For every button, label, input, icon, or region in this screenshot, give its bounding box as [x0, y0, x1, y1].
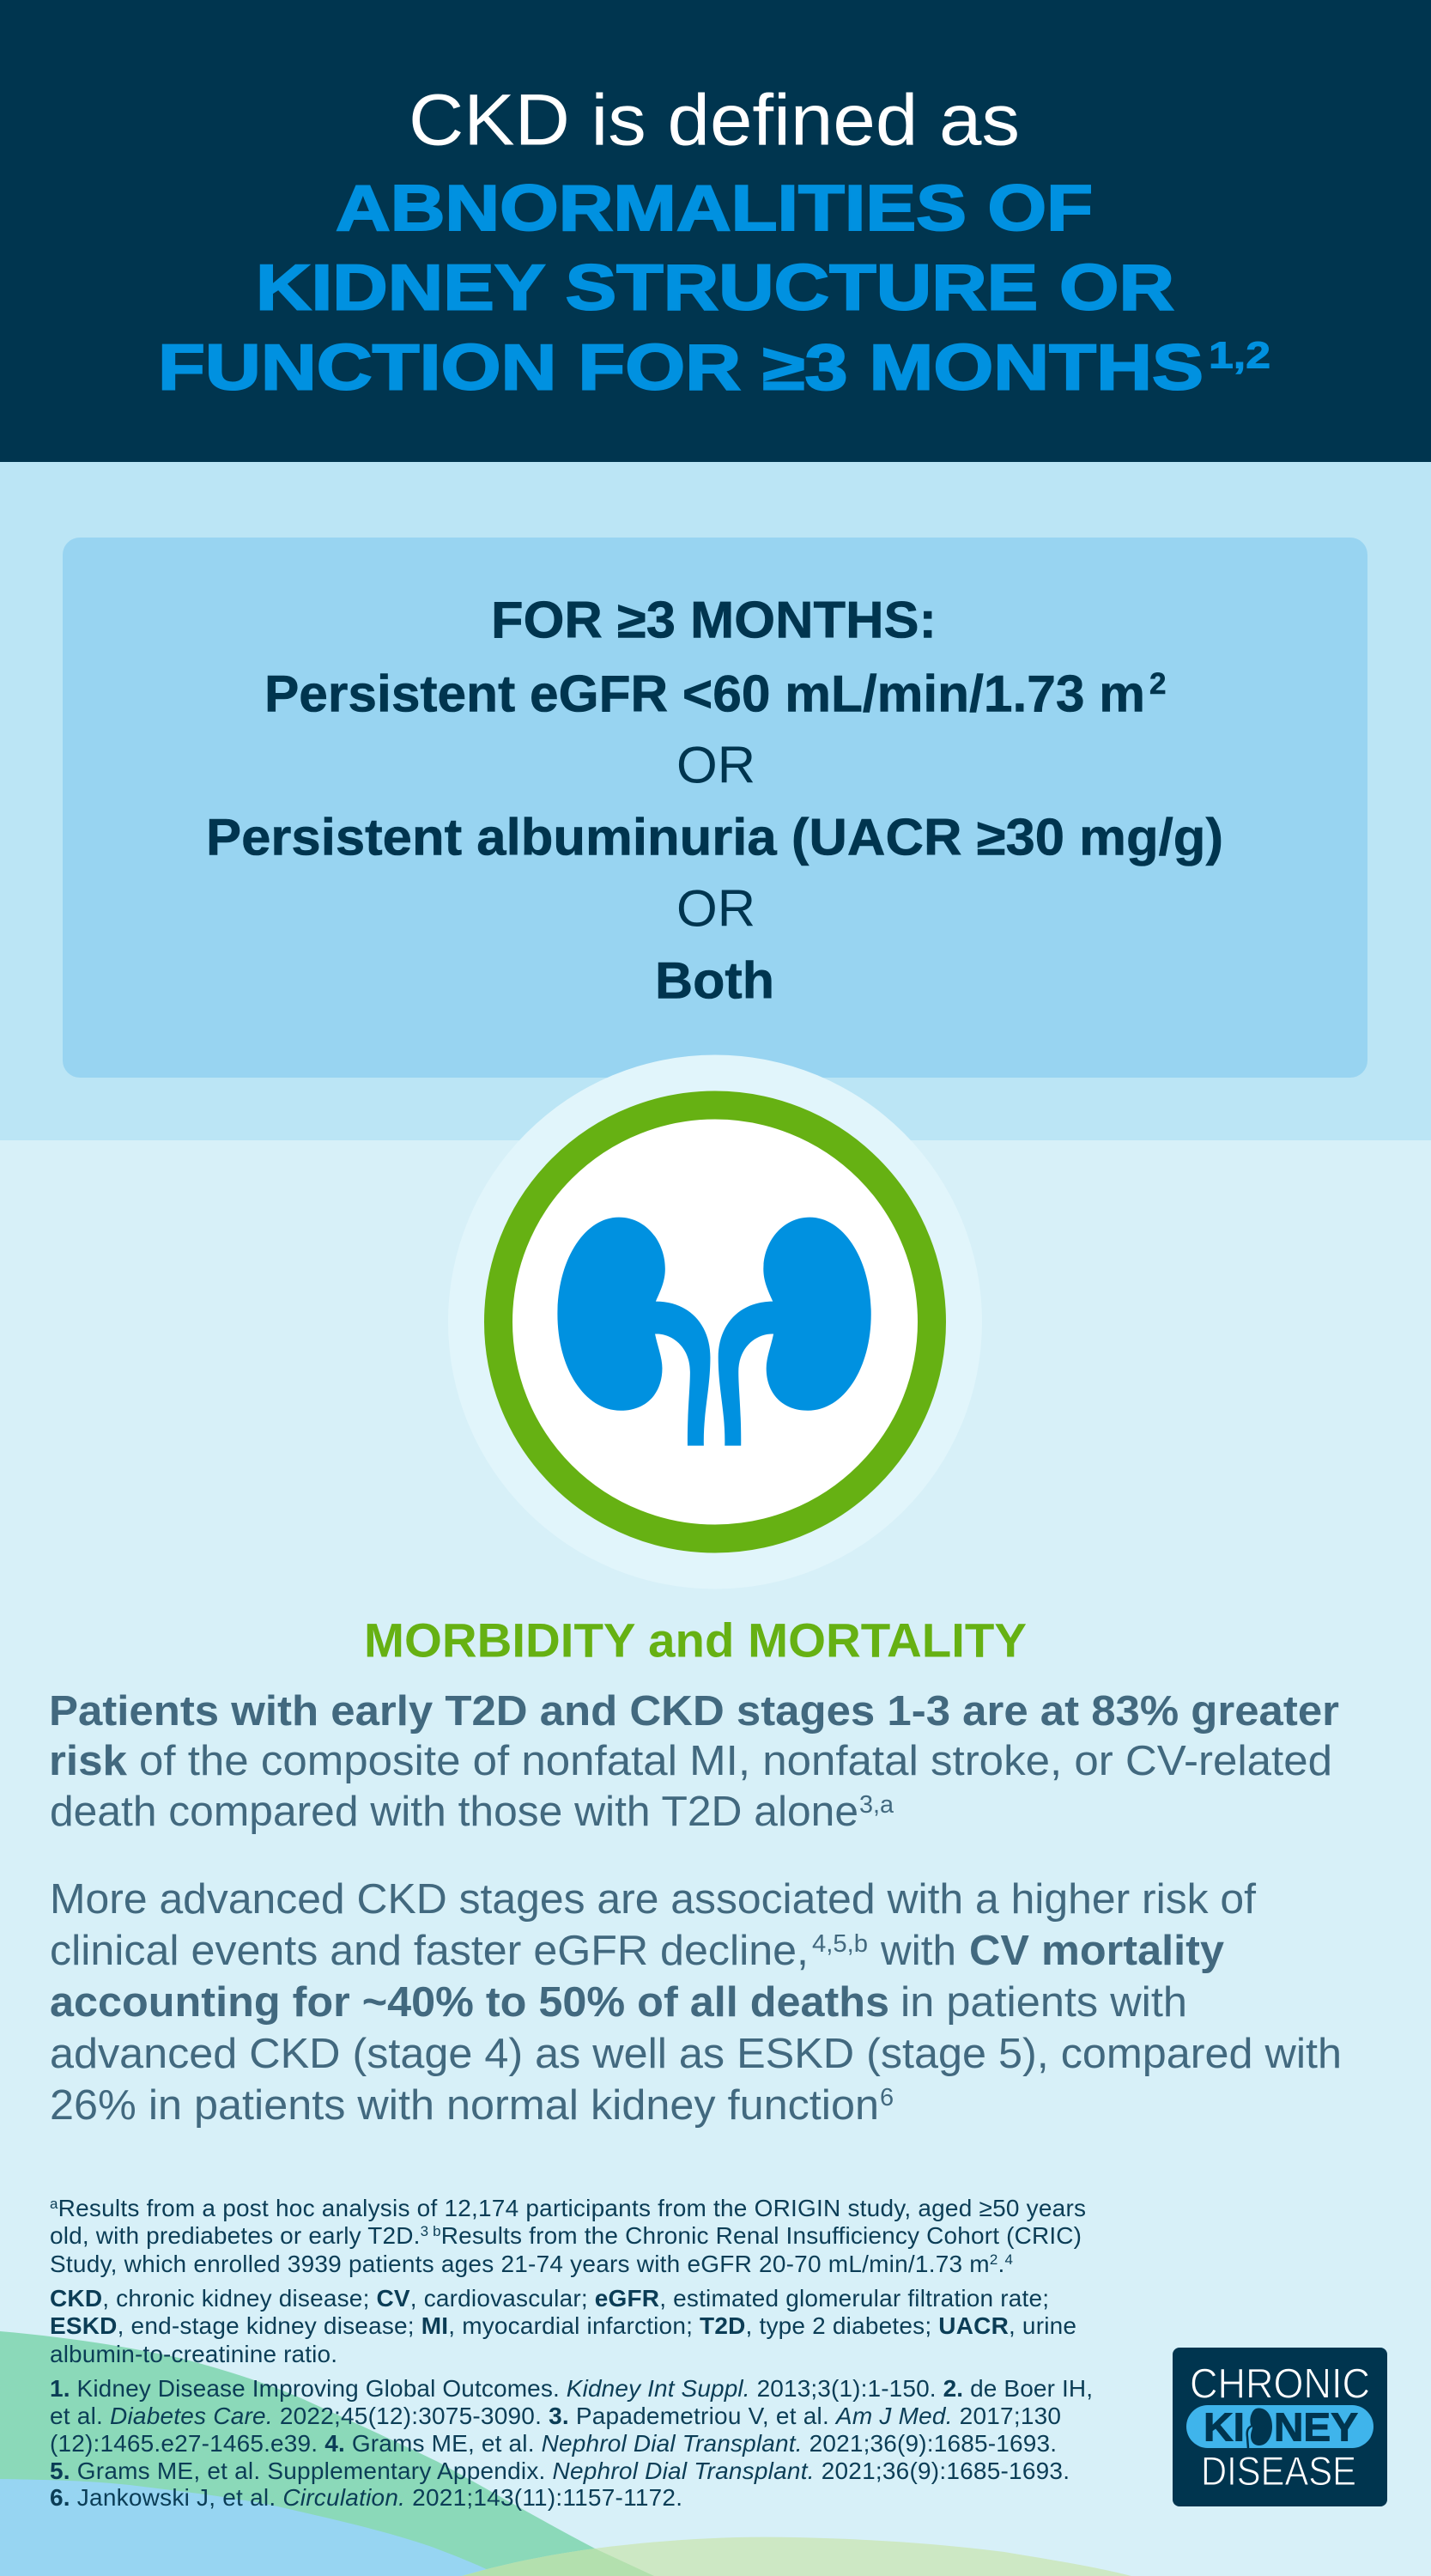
criterion: albuminuria: Persistent albuminuria (UACR ≥30 mg/g) [206, 809, 1223, 866]
logo: chronic kidney disease: NEY [1274, 2404, 1358, 2449]
text block: advanced CKD stages: in patients with [900, 1979, 1187, 2026]
references: 5. Grams ME, et al. Supplementary Appendix. Nephrol Dial Transplant. 2021;36(9):1685-1693. [50, 2458, 1070, 2484]
footnotes: 2 [990, 2251, 997, 2268]
footnotes [50, 2195, 1086, 2277]
icon: kidneys in green ring [448, 1054, 982, 1589]
text block: advanced CKD stages: 6 [880, 2084, 894, 2111]
footnotes: Study, which enrolled 3939 patients ages 21-74 years with eGFR 20-70 mL/min/1.73 m [50, 2251, 990, 2277]
text block: advanced CKD stages: with [880, 1928, 956, 1974]
text block: early T2D risk: risk [49, 1738, 128, 1784]
references: et al. Diabetes Care. 2022;45(12):3075-3090. 3. Papademetriou V, et al. Am J Med. 2017;130 [50, 2403, 1061, 2429]
title emphasis line 2: KIDNEY STRUCTURE OR [256, 251, 1174, 323]
logo: chronic kidney disease: DISEASE [1201, 2448, 1356, 2494]
OR separator 2: OR [676, 879, 755, 938]
decorative wave shapes bottom left [0, 2331, 1131, 2576]
text block: advanced CKD stages [50, 1876, 1342, 2129]
references: 1. Kidney Disease Improving Global Outcomes. Kidney Int Suppl. 2013;3(1):1-150. 2. de Boer IH, [50, 2375, 1093, 2402]
text block: early T2D risk: of the composite of nonfatal MI, nonfatal stroke, or CV-related [139, 1738, 1332, 1784]
OR separator 1: OR [676, 737, 755, 793]
header band [0, 0, 1431, 462]
logo: chronic kidney disease: KI [1204, 2404, 1245, 2449]
abbreviations: albumin-to-creatinine ratio. [50, 2341, 337, 2367]
footnotes: Results from the Chronic Renal Insufficiency Cohort (CRIC) [441, 2222, 1082, 2249]
text block: advanced CKD stages: advanced CKD (stage 4) as well as ESKD (stage 5), compared with [50, 2031, 1342, 2077]
footnotes: 3 b [421, 2223, 441, 2239]
title line: CKD is defined as: CKD is defined as [409, 79, 1020, 160]
footnotes: Results from a post hoc analysis of 12,174 participants from the ORIGIN study, aged ≥50 years [58, 2195, 1086, 2221]
footnotes: old, with prediabetes or early T2D. [50, 2222, 420, 2249]
text block: advanced CKD stages: More advanced CKD stages are associated with a higher risk of [50, 1876, 1256, 1923]
title emphasis line 1: ABNORMALITIES OF [336, 172, 1093, 244]
text block: early T2D risk: 3,a [859, 1791, 894, 1819]
references: 6. Jankowski J, et al. Circulation. 2021;143(11):1157-1172. [50, 2484, 682, 2511]
title emphasis line 3: FUNCTION FOR ≥3 MONTHS [158, 331, 1204, 404]
eGFR superscript: 2 [1149, 667, 1166, 701]
text block: advanced CKD stages: accounting for ~40% to 50% of all deaths [50, 1979, 889, 2026]
text block: early T2D risk [49, 1688, 1339, 1835]
title superscript references: 1,2 [1209, 335, 1270, 376]
footnotes: 4 [1005, 2251, 1013, 2268]
abbreviations: ESKD, end-stage kidney disease; MI, myocardial infarction; T2D, type 2 diabetes; UACR, urine [50, 2312, 1076, 2339]
references [50, 2375, 1093, 2511]
text block: advanced CKD stages: 4,5,b [812, 1930, 868, 1958]
logo: chronic kidney disease [1173, 2348, 1387, 2506]
text block: advanced CKD stages: CV mortality [969, 1928, 1224, 1974]
upper light blue band [0, 462, 1431, 1140]
text block: advanced CKD stages: clinical events and faster eGFR decline, [50, 1928, 809, 1974]
footnotes: . [998, 2251, 1004, 2277]
references: (12):1465.e27-1465.e39. 4. Grams ME, et al. Nephrol Dial Transplant. 2021;36(9):1685-1693. [50, 2430, 1057, 2457]
abbreviations [50, 2285, 1076, 2367]
criterion: eGFR: Persistent eGFR <60 mL/min/1.73 m [264, 665, 1145, 723]
abbreviations: CKD, chronic kidney disease; CV, cardiovascular; eGFR, estimated glomerular filtration rate; [50, 2285, 1049, 2312]
text block: early T2D risk: Patients with early T2D and CKD stages 1-3 are at 83% greater [49, 1688, 1339, 1735]
criterion: both: Both [655, 951, 774, 1010]
text block: early T2D risk: death compared with those with T2D alone [50, 1789, 858, 1835]
heading: morbidity and mortality: MORBIDITY and MORTALITY [364, 1613, 1027, 1668]
criteria heading: FOR ≥3 MONTHS: [491, 591, 937, 649]
panel: definition criteria [63, 538, 1367, 1078]
text block: advanced CKD stages: 26% in patients with normal kidney function [50, 2082, 879, 2129]
logo: chronic kidney disease: CHRONIC [1190, 2361, 1370, 2408]
footnotes: a [50, 2196, 58, 2212]
